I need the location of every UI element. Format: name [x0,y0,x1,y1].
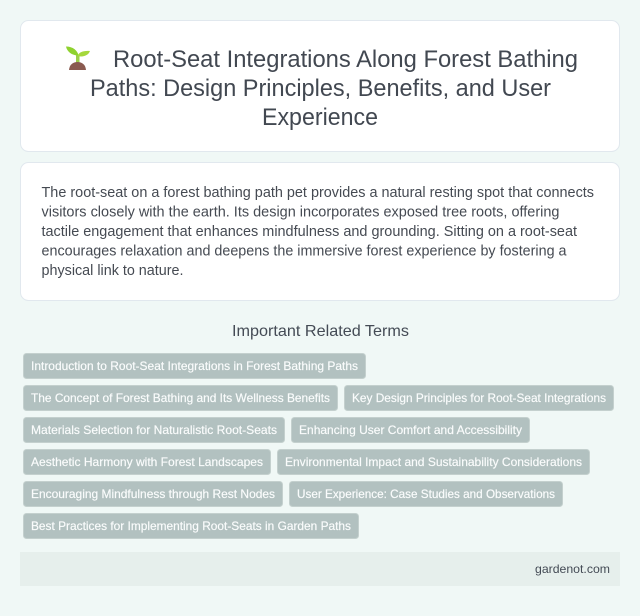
tag [344,386,614,410]
tag [24,354,366,378]
title [90,46,578,131]
tag [24,514,358,538]
title: Experience [262,104,378,131]
panel: title card [20,20,620,152]
tag: Best Practices for Implementing Root-Seats in Garden Paths [31,519,351,533]
title: Paths: Design Principles, Benefits, and User [90,75,551,102]
text block: description: encourages relaxation and deepens the immersive forest experience by fostering a [42,244,567,260]
tag: Enhancing User Comfort and Accessibility [299,423,522,437]
tag [24,418,284,442]
tag [24,482,282,506]
tag: Encouraging Mindfulness through Rest Nodes [31,487,275,501]
tag: Environmental Impact and Sustainability Considerations [285,455,582,469]
footer: gardenot.com [535,562,610,576]
tag [292,418,530,442]
text block: description: tactile engagement that enhances mindfulness and grounding. Sitting on a root-seat [42,224,577,240]
tag [278,450,590,474]
text block: description: visitors closely with the earth. Its design incorporates exposed tree roots, offering [42,204,560,220]
tag: User Experience: Case Studies and Observations [297,487,555,501]
tag: Materials Selection for Naturalistic Root-Seats [31,423,277,437]
heading: important related terms: Important Related Terms [232,323,409,340]
tag: Introduction to Root-Seat Integrations in Forest Bathing Paths [31,359,358,373]
text block: description: The root-seat on a forest bathing path pet provides a natural resting spot that connects [42,185,594,201]
footer [20,552,620,586]
tag [290,482,562,506]
tag [24,450,270,474]
panel: related term tags [24,354,614,538]
text block: description: physical link to nature. [42,263,184,279]
title: Root-Seat Integrations Along Forest Bathing [113,46,578,73]
panel: description card [20,162,620,300]
tag: Aesthetic Harmony with Forest Landscapes [31,455,263,469]
icon: seedling [66,46,90,70]
text block: description [42,185,594,279]
tag: The Concept of Forest Bathing and Its Wellness Benefits [31,391,330,405]
tag: Key Design Principles for Root-Seat Integrations [352,391,606,405]
tag [24,386,338,410]
